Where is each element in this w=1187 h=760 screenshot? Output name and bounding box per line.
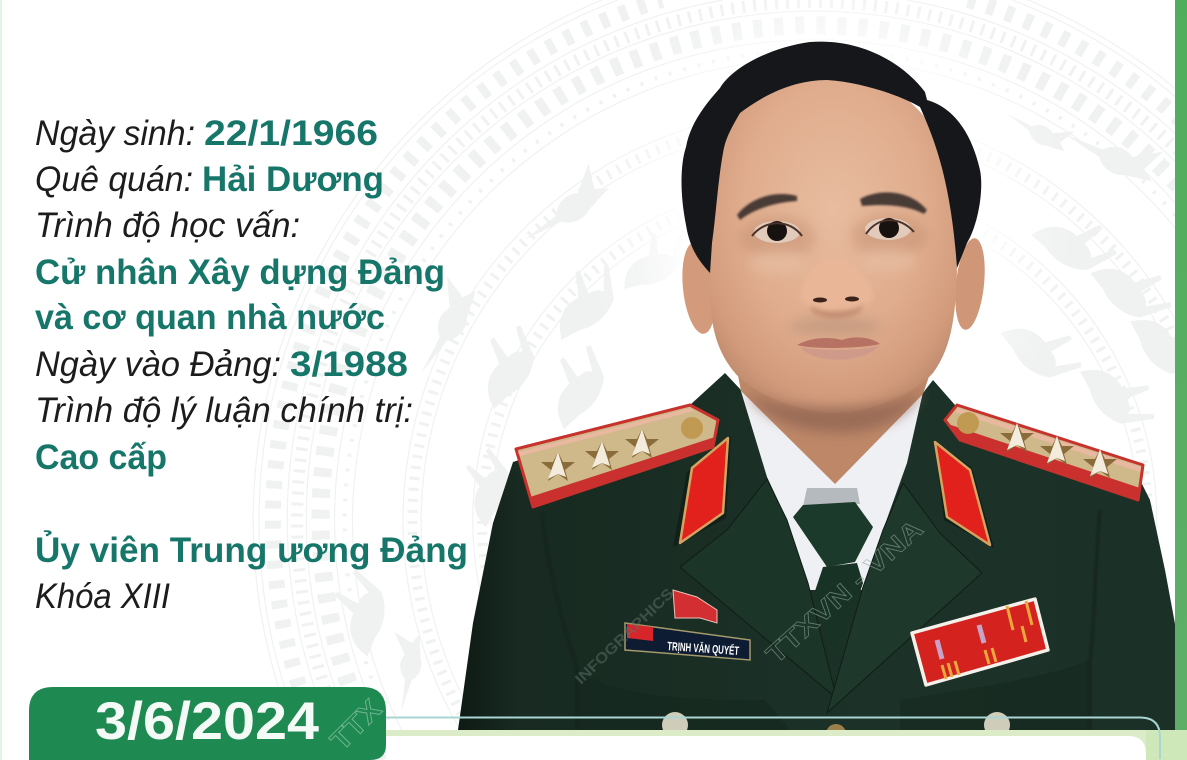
medal ribbon xyxy=(912,599,1048,685)
right green strip xyxy=(1175,0,1187,730)
party entry: 3/1988 xyxy=(290,345,408,384)
uniform jacket xyxy=(458,373,1187,730)
chin shadow xyxy=(745,390,925,432)
date pill xyxy=(29,687,386,760)
necktie xyxy=(793,488,873,660)
political theory label: Trình độ lý luận chính trị: xyxy=(35,391,413,430)
watermark: TTX on pill: TTX xyxy=(324,693,388,756)
drum animals xyxy=(330,98,1187,713)
face xyxy=(710,75,957,413)
pale green corner xyxy=(1146,730,1187,760)
stars xyxy=(541,429,659,481)
neck xyxy=(733,350,938,484)
birth date: Ngày sinh: xyxy=(35,114,195,153)
political theory value: Cao cấp xyxy=(35,438,167,477)
name plate xyxy=(625,623,750,660)
facial shading xyxy=(739,214,927,335)
name plate: TRỊNH VĂN QUYẾT xyxy=(667,638,740,658)
left edge tint xyxy=(0,0,2,760)
jacket pockets xyxy=(575,660,1090,730)
left collar tab xyxy=(673,436,731,547)
right epaulette xyxy=(945,405,1143,500)
hair xyxy=(682,42,981,273)
right eye xyxy=(865,218,914,240)
white bottom card xyxy=(386,736,1146,760)
left ear xyxy=(678,241,720,335)
education value line 2: và cơ quan nhà nước xyxy=(35,298,385,337)
right lapel xyxy=(827,483,982,713)
watermark: TTXVN VNA: TTXVN - VNA xyxy=(760,513,929,669)
right ear xyxy=(951,237,989,331)
left eyebrow xyxy=(737,194,797,220)
central committee: Ủy viên Trung ương Đảng xyxy=(35,530,468,570)
flag pin xyxy=(673,590,717,623)
connector line xyxy=(385,718,1160,759)
hometown xyxy=(35,160,384,199)
mouth xyxy=(797,337,880,360)
education label: Trình độ học vấn: xyxy=(35,206,300,245)
left eye xyxy=(752,221,802,243)
right collar tab xyxy=(934,440,994,548)
emblem xyxy=(957,412,979,434)
emblem xyxy=(681,417,703,439)
left lapel xyxy=(680,479,835,697)
party entry: Ngày vào Đảng: xyxy=(35,345,281,384)
watermark: INFOGRAPHICS: INFOGRAPHICS xyxy=(572,585,677,688)
portrait of the general xyxy=(458,42,1187,744)
sleeve seams xyxy=(542,510,1100,730)
hometown: Hải Dương xyxy=(202,160,384,199)
right eyebrow xyxy=(860,192,927,214)
term: Khóa XIII xyxy=(35,577,170,616)
education value line 1: Cử nhân Xây dựng Đảng xyxy=(35,253,445,292)
birth date: 22/1/1966 xyxy=(204,114,378,153)
date text: 3/6/2024 xyxy=(95,692,320,751)
party entry xyxy=(35,345,408,384)
shirt collar xyxy=(740,388,923,590)
photo bottom edge band xyxy=(386,730,1187,760)
white glow behind head xyxy=(645,20,1015,440)
hometown: Quê quán: xyxy=(35,160,193,199)
bronze drum pattern xyxy=(253,0,1187,760)
birth date xyxy=(35,114,378,153)
stars xyxy=(1000,423,1117,478)
nose xyxy=(800,258,874,318)
biography text block xyxy=(35,114,468,616)
left epaulette xyxy=(516,405,718,507)
jacket buttons xyxy=(662,712,1010,744)
